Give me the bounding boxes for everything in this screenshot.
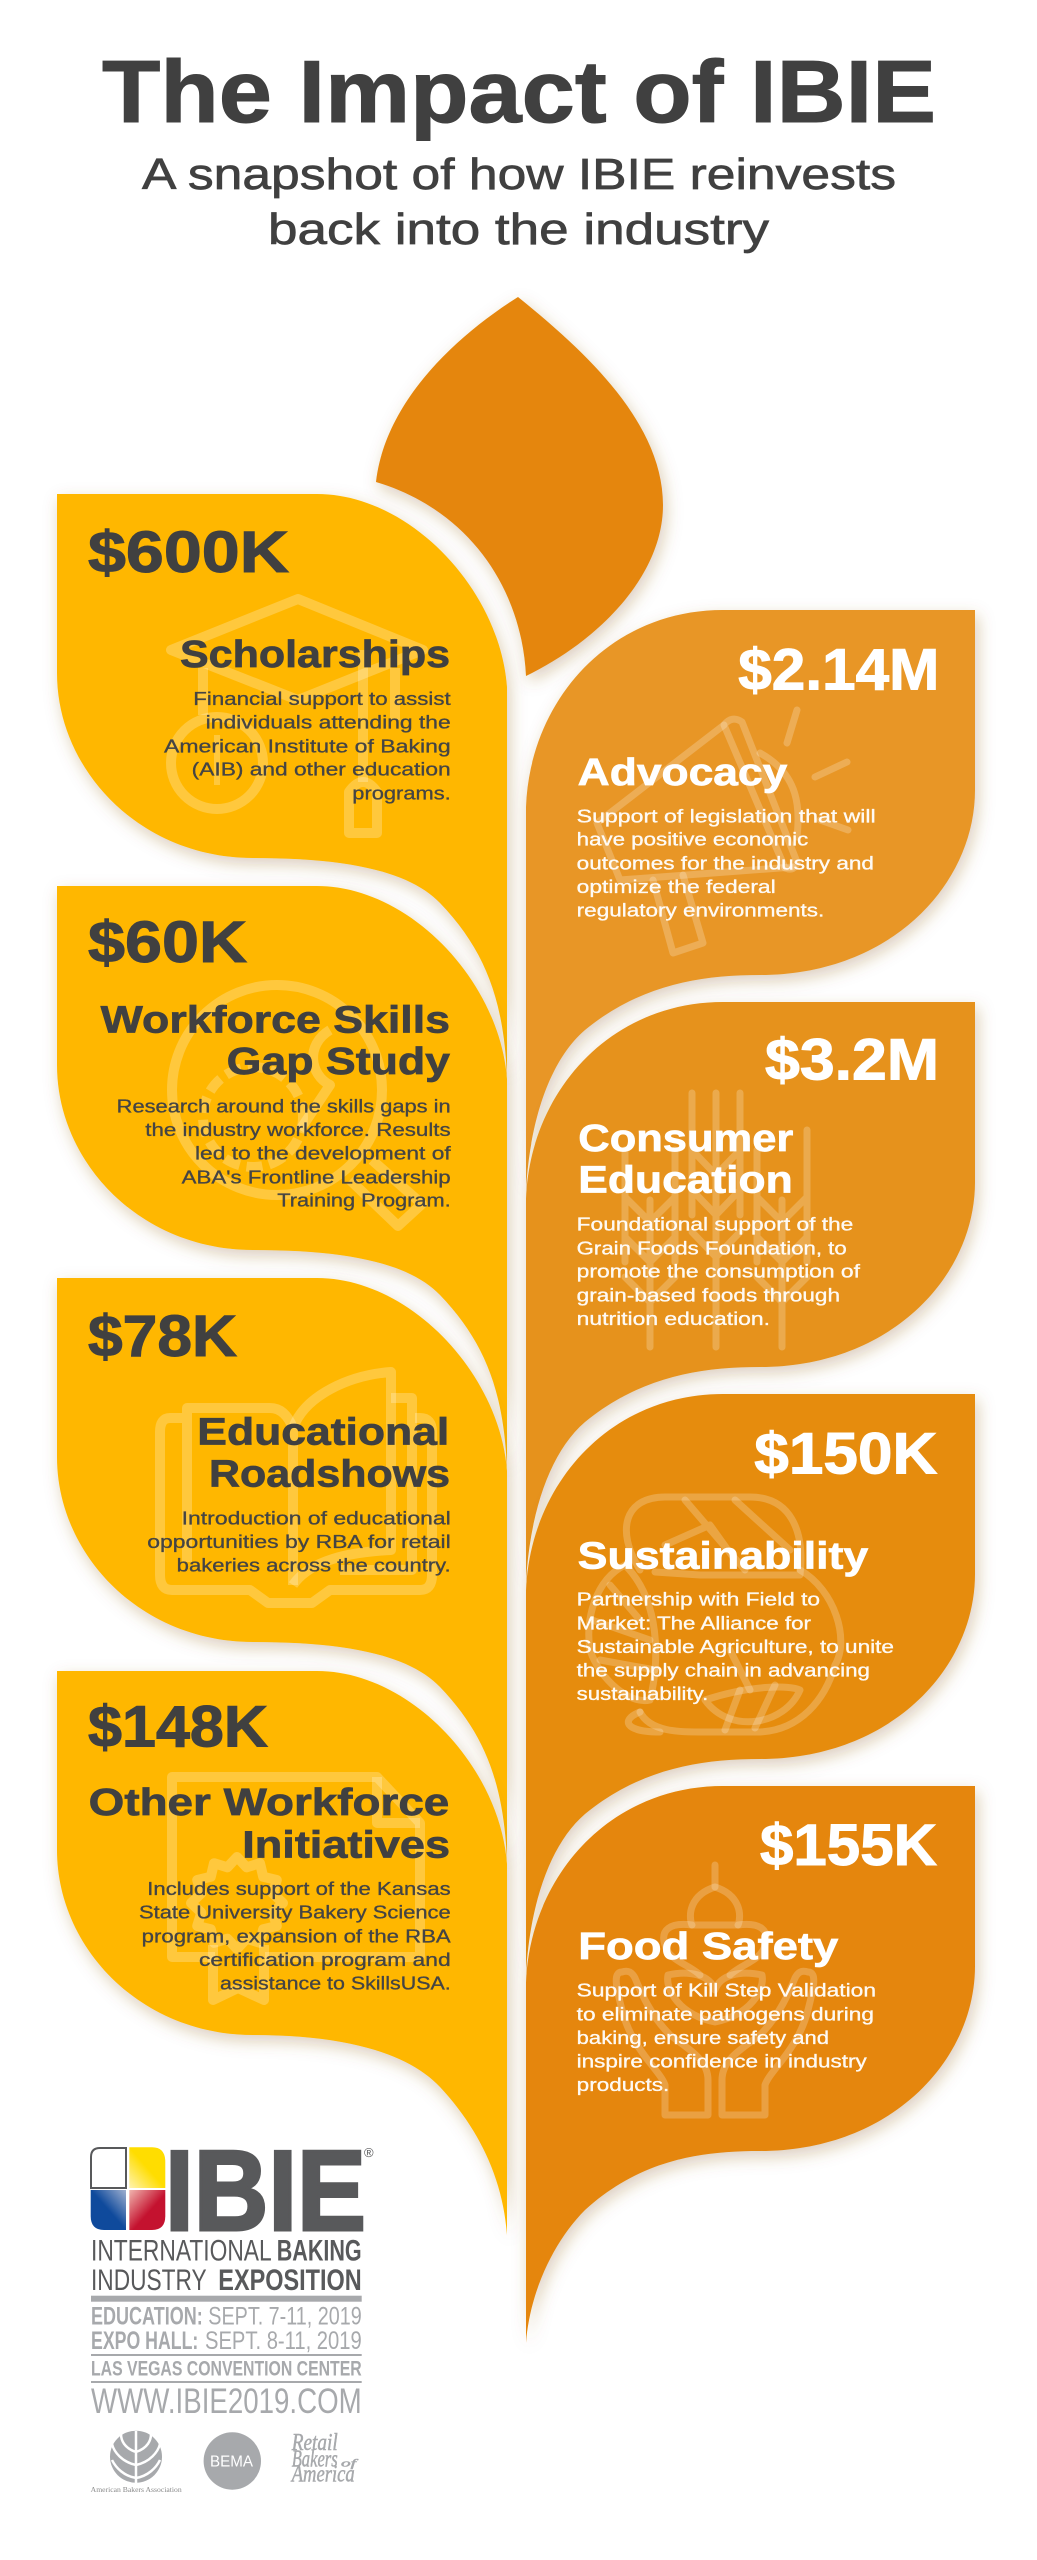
- heading: [197, 1411, 450, 1496]
- registered mark: ®: [364, 2145, 374, 2160]
- panel: workforce skills gap study: [57, 886, 507, 1469]
- body text: regulatory environments.: [577, 900, 824, 921]
- heading: Gap Study: [227, 1041, 450, 1083]
- body text: ABA's Frontline Leadership: [182, 1166, 451, 1187]
- body text: sustainability.: [577, 1683, 708, 1704]
- panel: other workforce initiatives: [57, 1671, 507, 2235]
- icon: wheat stalks: [625, 1093, 807, 1347]
- body text: [577, 1589, 894, 1704]
- body text: State University Bakery Science: [139, 1902, 451, 1923]
- body text: Includes support of the Kansas: [147, 1878, 451, 1899]
- venue: LAS VEGAS CONVENTION CENTER: [91, 2358, 362, 2381]
- body text: Market: The Alliance for: [577, 1612, 811, 1633]
- heading: Food Safety: [578, 1926, 838, 1968]
- heading: Initiatives: [242, 1824, 450, 1866]
- body text: to eliminate pathogens during: [577, 2003, 874, 2024]
- body text: opportunities by RBA for retail: [147, 1531, 451, 1552]
- logo: BEMA: [204, 2432, 261, 2490]
- icon: hands holding wheat: [616, 1865, 814, 2115]
- panel: sustainability: [526, 1394, 975, 1974]
- icon: graduation cap: [171, 599, 423, 833]
- panel: advocacy: [526, 610, 975, 1190]
- wordmark: IBIE: [165, 2128, 366, 2255]
- logo: Retail Bakers of America: America: [290, 2462, 355, 2488]
- logo: Retail Bakers of America: of: [341, 2458, 359, 2470]
- dates: EXPO HALL:: [91, 2327, 198, 2355]
- logo: Retail Bakers of America: Bakers: [292, 2447, 338, 2473]
- body text: certification program and: [199, 1949, 451, 1970]
- body text: Financial support to assist: [193, 688, 451, 709]
- body text: have positive economic: [577, 829, 808, 850]
- body text: [117, 1095, 452, 1211]
- heading: Education: [578, 1160, 793, 1202]
- body text: assistance to SkillsUSA.: [220, 1972, 451, 1993]
- expo name: INTERNATIONAL: [91, 2235, 272, 2268]
- icon: recycling leaves: [589, 1497, 841, 1732]
- expo name: INDUSTRY: [91, 2264, 207, 2297]
- amount: $2.14M: [738, 637, 939, 702]
- amount: $155K: [760, 1813, 937, 1878]
- amount: $3.2M: [765, 1027, 939, 1092]
- heading: Educational: [197, 1411, 449, 1453]
- body text: [164, 688, 451, 803]
- title: The Impact of IBIE: [102, 42, 936, 141]
- heading: [89, 1782, 450, 1866]
- body text: (AIB) and other education: [192, 759, 451, 780]
- body text: products.: [577, 2074, 669, 2095]
- expo name: [91, 2235, 362, 2297]
- body text: programs.: [352, 782, 451, 803]
- icon: certificate: [172, 1777, 420, 2000]
- logo: BEMA: BEMA: [210, 2454, 253, 2471]
- body text: the industry workforce. Results: [145, 1119, 451, 1140]
- panel: educational roadshows: [57, 1278, 507, 1861]
- logo: Retail Bakers of America: [290, 2430, 359, 2488]
- body text: bakeries across the country.: [177, 1554, 451, 1575]
- body text: [139, 1878, 451, 1993]
- heading: Sustainability: [578, 1535, 868, 1577]
- body text: [577, 1980, 876, 2095]
- icon: four-colour square: [91, 2147, 165, 2230]
- website: WWW.IBIE2019.COM: [91, 2382, 362, 2421]
- heading: Advocacy: [578, 752, 787, 794]
- logo: American Bakers Association: [91, 2431, 182, 2494]
- dates: SEPT. 8-11, 2019: [205, 2327, 362, 2355]
- heading: Consumer: [578, 1118, 794, 1160]
- body text: Partnership with Field to: [577, 1589, 820, 1610]
- amount: $600K: [88, 520, 289, 585]
- body text: [577, 805, 876, 921]
- heading: [578, 1118, 794, 1202]
- amount: $60K: [88, 910, 247, 975]
- top leaf: [376, 297, 663, 676]
- amount: $148K: [88, 1695, 268, 1760]
- body text: the supply chain in advancing: [577, 1660, 870, 1681]
- heading: Workforce Skills: [101, 999, 450, 1041]
- logo: IBIE: [91, 2128, 374, 2421]
- panel: scholarships: [57, 494, 507, 1077]
- dates: EDUCATION:: [91, 2302, 203, 2330]
- body text: Introduction of educational: [182, 1507, 451, 1528]
- body text: inspire confidence in industry: [577, 2051, 868, 2072]
- body text: Training Program.: [277, 1190, 451, 1211]
- body text: Support of legislation that will: [577, 805, 876, 826]
- body text: program, expansion of the RBA: [142, 1925, 451, 1946]
- expo name: BAKING: [277, 2235, 362, 2268]
- heading: Scholarships: [180, 634, 450, 676]
- body text: promote the consumption of: [577, 1261, 861, 1282]
- heading: Roadshows: [209, 1454, 450, 1496]
- subtitle: back into the industry: [268, 205, 769, 254]
- icon: megaphone: [597, 710, 848, 953]
- body text: optimize the federal: [577, 876, 776, 897]
- body text: Sustainable Agriculture, to unite: [577, 1636, 894, 1657]
- body text: outcomes for the industry and: [577, 852, 874, 873]
- body text: Foundational support of the: [577, 1214, 853, 1235]
- logo: Retail Bakers of America: Retail: [291, 2430, 338, 2456]
- body text: nutrition education.: [577, 1308, 770, 1329]
- body text: baking, ensure safety and: [577, 2027, 829, 2048]
- body text: [147, 1507, 451, 1575]
- dates: SEPT. 7-11, 2019: [208, 2302, 362, 2330]
- body text: [577, 1214, 861, 1329]
- subtitle: [142, 150, 896, 254]
- icon: magnifying glass with gear: [172, 985, 422, 1226]
- body text: American Institute of Baking: [164, 735, 451, 756]
- body text: individuals attending the: [206, 711, 451, 732]
- panel: consumer education: [526, 1002, 975, 1582]
- logo: American Bakers Association: American Bakers Association: [91, 2485, 182, 2494]
- amount: $78K: [88, 1304, 237, 1369]
- body text: Research around the skills gaps in: [117, 1095, 451, 1116]
- amount: $150K: [754, 1421, 937, 1486]
- body text: Support of Kill Step Validation: [577, 1980, 876, 2001]
- body text: grain-based foods through: [577, 1285, 840, 1306]
- dates: [91, 2302, 362, 2355]
- expo name: EXPOSITION: [218, 2264, 362, 2297]
- heading: [101, 999, 450, 1083]
- subtitle: A snapshot of how IBIE reinvests: [142, 150, 896, 199]
- panel: food safety: [526, 1786, 975, 2343]
- body text: led to the development of: [195, 1142, 452, 1163]
- body text: Grain Foods Foundation, to: [577, 1237, 847, 1258]
- icon: open book: [160, 1372, 432, 1603]
- heading: Other Workforce: [89, 1782, 449, 1824]
